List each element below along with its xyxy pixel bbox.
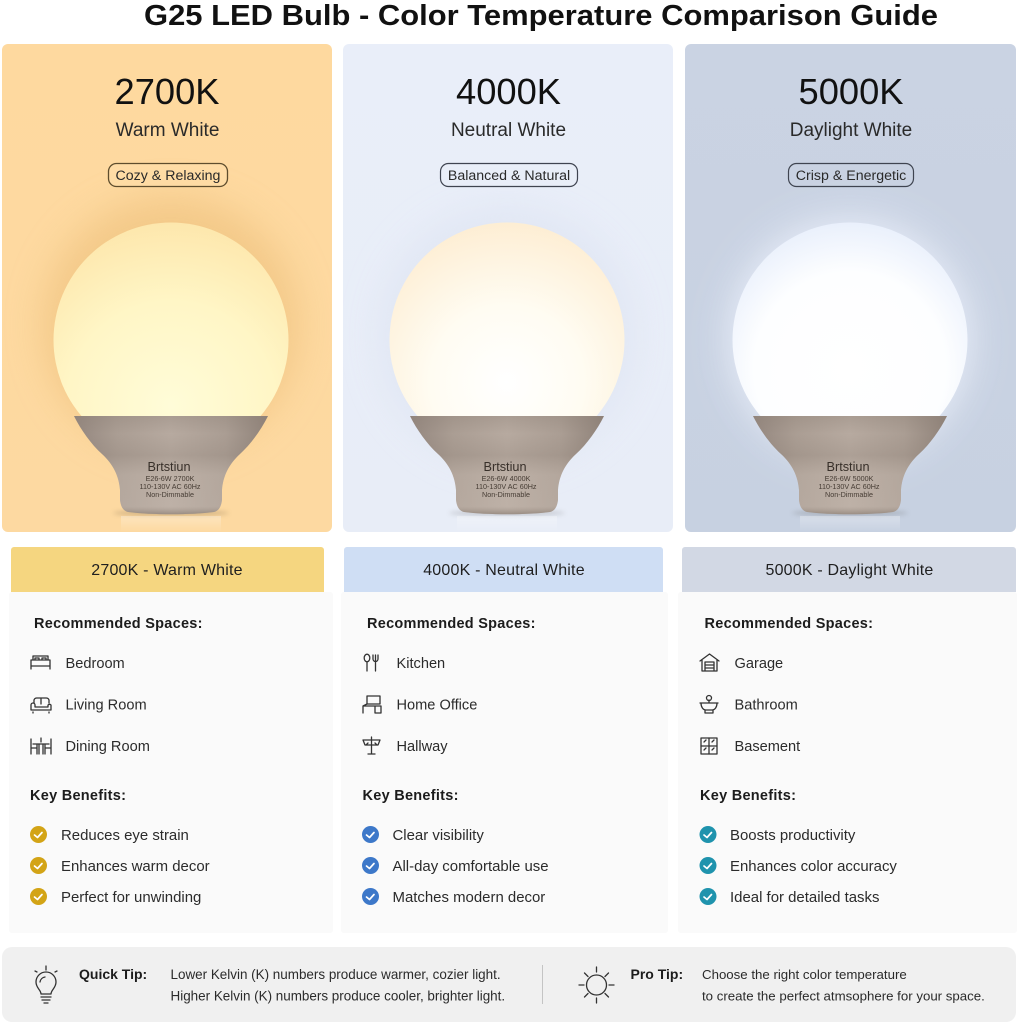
panel: 4000K recommendations	[341, 547, 668, 933]
heading: Recommended Spaces: Recommended Spaces:	[704, 616, 873, 632]
heading: Key Benefits: Key Benefits:	[362, 788, 459, 804]
icon: daylight bulb: Non-Dimmable	[825, 490, 873, 499]
text: color temperature tip: Choose the right color temperature	[702, 967, 907, 982]
panel: tips bar	[2, 947, 1016, 1022]
text: color temperature tip: to create the perfect atmsophere for your space.	[702, 988, 985, 1004]
icon: daylight bulb	[728, 218, 972, 532]
pill: Balanced & Natural	[440, 164, 578, 186]
icon: wash basin	[700, 696, 718, 713]
pill: Crisp & Energetic: Crisp & Energetic	[796, 168, 906, 184]
icon: neutral bulb	[390, 222, 624, 516]
panel: 5000K recommendations	[678, 547, 1017, 933]
subheading: Neutral White: Neutral White	[451, 120, 566, 141]
heading: Recommended Spaces: Recommended Spaces:	[34, 616, 203, 632]
icon: spoon and fork	[364, 654, 378, 671]
header band: 2700K	[11, 547, 324, 592]
icon: desk	[363, 696, 381, 713]
subheading: Warm White: Warm White	[116, 120, 219, 141]
label: Garage: Garage	[734, 656, 783, 672]
panel: 5000K bulb	[685, 44, 1016, 532]
header band: 4000K	[344, 547, 663, 592]
label: Bathroom: Bathroom	[734, 698, 798, 714]
text: Kelvin tip: Lower Kelvin (K) numbers produce warmer, cozier light.	[170, 967, 501, 982]
icon: dining table	[31, 738, 51, 754]
icon: neutral bulb: Non-Dimmable	[482, 490, 530, 499]
benefit: Enhances warm decor: Enhances warm decor	[61, 858, 210, 875]
icon: bed	[31, 656, 50, 669]
heading: 2700K: 2700K	[115, 71, 219, 112]
header band: 5000K	[682, 547, 1016, 592]
label: Quick Tip: Quick Tip:	[79, 966, 147, 982]
heading: Key Benefits: Key Benefits:	[700, 788, 796, 804]
label: Hallway: Hallway	[396, 739, 448, 755]
label: Pro Tip: Pro Tip:	[630, 966, 683, 982]
benefit: Perfect for unwinding: Perfect for unwinding	[61, 889, 201, 906]
benefit: Reduces eye strain: Reduces eye strain	[61, 827, 189, 844]
benefit: Matches modern decor: Matches modern decor	[392, 889, 545, 906]
icon: warm bulb: Brtstiun	[147, 460, 191, 474]
benefit: Ideal for detailed tasks: Ideal for detailed tasks	[730, 889, 879, 906]
icon: daylight bulb: E26-6W 5000K	[825, 474, 874, 483]
icon: daylight bulb: 110-130V AC 60Hz	[818, 482, 880, 491]
icon: sun	[579, 967, 614, 1003]
pill: Cozy & Relaxing	[108, 164, 228, 186]
panel: 4000K bulb	[343, 44, 673, 532]
icon: sofa	[31, 698, 51, 713]
benefit: Clear visibility: Clear visibility	[392, 827, 484, 844]
panel: 2700K bulb	[2, 44, 332, 532]
label: Living Room: Living Room	[66, 698, 147, 714]
label: Bedroom: Bedroom	[66, 656, 125, 672]
icon: neutral bulb: E26-6W 4000K	[482, 474, 531, 483]
text: Kelvin tip: Higher Kelvin (K) numbers produce cooler, brighter light.	[170, 988, 505, 1004]
icon: warm bulb	[43, 197, 299, 532]
icon: warm bulb: E26-6W 2700K	[146, 474, 195, 483]
icon: light bulb	[35, 966, 57, 1003]
heading: Key Benefits: Key Benefits:	[30, 788, 126, 804]
panel: 2700K recommendations	[9, 547, 333, 933]
icon: neutral bulb: 110-130V AC 60Hz	[476, 482, 537, 491]
label: Kitchen: Kitchen	[396, 656, 445, 672]
heading: 4000K: 4000K	[456, 71, 561, 112]
benefit: Enhances color accuracy: Enhances color accuracy	[730, 858, 897, 875]
header band: 5000K: 5000K - Daylight White	[765, 562, 934, 579]
icon: shelves	[701, 738, 717, 754]
heading: Recommended Spaces: Recommended Spaces:	[367, 616, 536, 632]
icon: warm bulb: 110-130V AC 60Hz	[140, 482, 201, 491]
label: Basement: Basement	[734, 739, 800, 755]
subheading: Daylight White: Daylight White	[790, 120, 912, 141]
icon: daylight bulb: Brtstiun	[826, 460, 870, 474]
text: color temperature tip	[702, 967, 985, 1004]
icon: warm bulb: Non-Dimmable	[146, 490, 194, 499]
text: Kelvin tip	[170, 967, 505, 1004]
pill: Balanced & Natural: Balanced & Natural	[448, 168, 570, 184]
header band: 4000K: 4000K - Neutral White	[423, 562, 585, 579]
icon: hallway table	[363, 737, 380, 754]
title: G25 LED Bulb - Color Temperature Comparison Guide	[144, 0, 938, 32]
label: Dining Room: Dining Room	[66, 739, 150, 755]
heading: 5000K: 5000K	[799, 71, 903, 112]
pill: Cozy & Relaxing: Cozy & Relaxing	[116, 168, 220, 184]
benefit: All-day comfortable use: All-day comfortable use	[392, 858, 549, 875]
icon: garage	[700, 654, 719, 671]
label: Home Office: Home Office	[396, 698, 477, 714]
icon: neutral bulb: Brtstiun	[483, 460, 527, 474]
header band: 2700K: 2700K - Warm White	[91, 562, 243, 579]
pill: Crisp & Energetic	[788, 164, 914, 186]
benefit: Boosts productivity: Boosts productivity	[730, 827, 856, 844]
